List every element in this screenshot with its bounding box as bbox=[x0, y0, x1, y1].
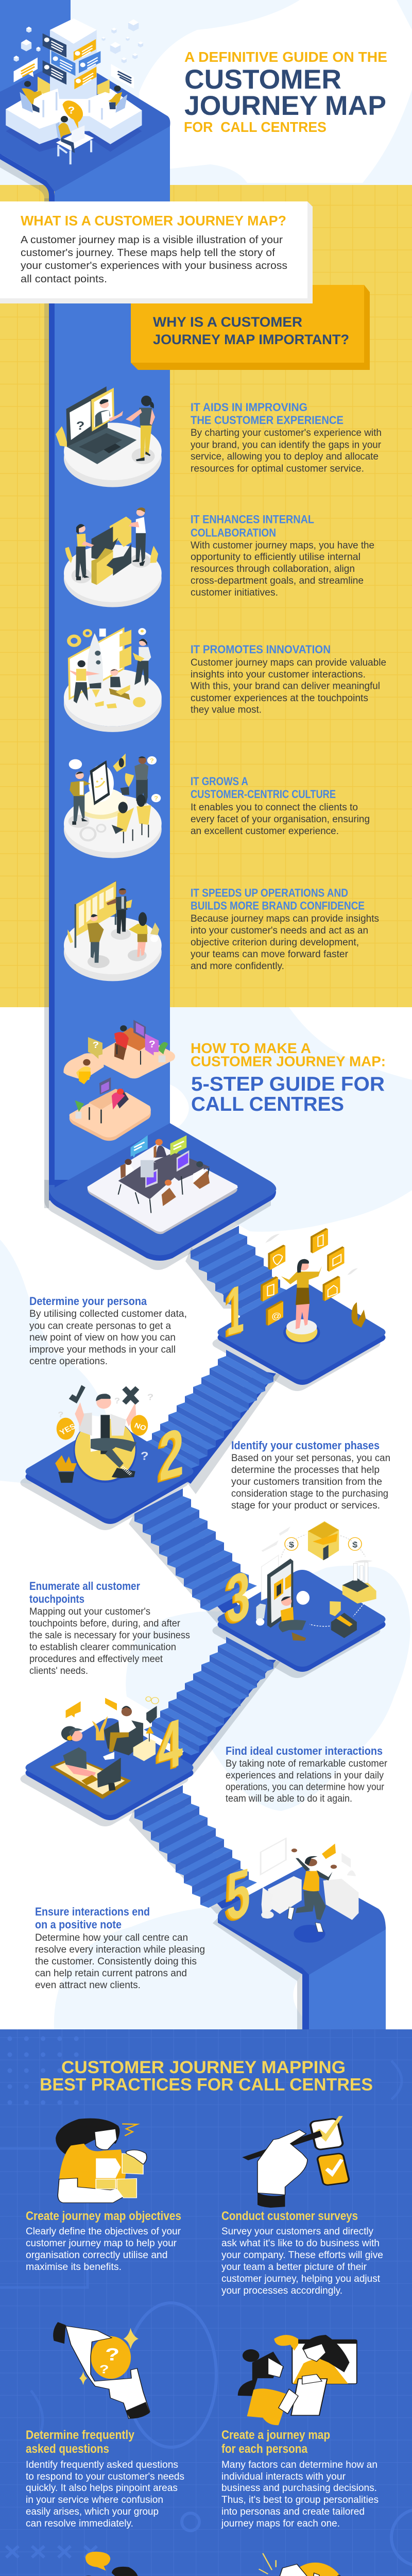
text: it promotes innovation: Customer journey maps can provide valuable bbox=[191, 657, 386, 668]
illustration: customer calling and support desks bbox=[63, 1020, 238, 1234]
panel: what is a customer journey map: A customer journey map is a visible illustration of your bbox=[21, 234, 283, 246]
column: lower platform bbox=[44, 1123, 276, 1270]
step 3: enumerate all customer touchpoints bbox=[29, 1580, 190, 1676]
step 4: find ideal customer interactions: operations, you can determine how your bbox=[226, 1782, 385, 1793]
text: conduct customer surveys: Survey your customers and directly bbox=[221, 2226, 373, 2237]
step 1: number: 1 bbox=[225, 1271, 243, 1351]
step 2: undecided man illustration: ? bbox=[141, 1450, 149, 1463]
illustration: customer-centric culture: ? bbox=[154, 795, 158, 802]
platform 3 bbox=[212, 1570, 385, 1678]
persona tiles bbox=[261, 1228, 344, 1326]
text: create a journey map for each persona bbox=[221, 2428, 379, 2529]
yes and no coins: YES bbox=[58, 1422, 77, 1437]
step 1: determine your persona bbox=[29, 1295, 187, 1367]
step 3: enumerate all customer touchpoints: touchpoints bbox=[29, 1592, 84, 1605]
step 4: number: 4 bbox=[158, 1704, 183, 1786]
panel: what is a customer journey map: all contact points. bbox=[21, 274, 107, 285]
text: it enhances internal collaboration: IT ENHANCES INTERNAL bbox=[191, 513, 314, 526]
text: conduct customer surveys: ask what it's like to do business with bbox=[221, 2238, 380, 2249]
chat cards bbox=[43, 33, 100, 89]
text: create journey map objectives: maximise its benefits. bbox=[26, 2262, 122, 2273]
front desk agent bbox=[56, 116, 94, 164]
text: it enhances internal collaboration: resources through collaboration, align bbox=[191, 564, 355, 574]
text: it grows a customer-centric culture bbox=[191, 775, 370, 837]
step 3: number: 3 bbox=[225, 1557, 249, 1639]
step 5: ensure interactions end on a positive note bbox=[35, 1905, 205, 1991]
text: it aids in improving: service, allowing you to deploy and allocate bbox=[191, 451, 379, 462]
text: create a journey map for each persona: business and purchasing decisions. bbox=[221, 2483, 377, 2494]
step 2: identify your customer phases bbox=[231, 1439, 390, 1511]
illustration: hand ticking checkboxes bbox=[244, 2116, 350, 2208]
step 5: ensure interactions end on a positive note: can help retain current patrons and bbox=[35, 1968, 187, 1979]
step 3: enumerate all customer touchpoints: procedures and effectively meet bbox=[29, 1654, 163, 1665]
illustration: hand holding question bubble bbox=[53, 2322, 150, 2419]
text: it promotes innovation: With this, your brand can deliver meaningful bbox=[191, 681, 380, 691]
heading: how to make a customer journey map bbox=[191, 1040, 386, 1115]
step 1: determine your persona: centre operations. bbox=[29, 1356, 108, 1367]
step 5: number: 5 bbox=[224, 1856, 248, 1938]
text: conduct customer surveys: your team a better picture of their bbox=[221, 2262, 367, 2273]
text: create journey map objectives bbox=[26, 2209, 181, 2273]
text: create journey map objectives: organisation correctly utilise and bbox=[26, 2250, 168, 2261]
speech bubbles bbox=[131, 1136, 186, 1158]
text: determine frequently asked questions: in your service where confusion bbox=[26, 2495, 163, 2505]
server tower bbox=[50, 19, 97, 113]
heading: how to make a customer journey map: CUSTOMER JOURNEY MAP: bbox=[191, 1053, 386, 1070]
step 4: number: 4 bbox=[155, 1706, 181, 1788]
text: it promotes innovation: IT PROMOTES INNOVATION bbox=[191, 643, 331, 656]
text: create a journey map for each persona: individual interacts with your bbox=[221, 2471, 346, 2482]
text: it speeds up operations bbox=[191, 886, 379, 972]
step 3: enumerate all customer touchpoints: Mapping out your customer's bbox=[29, 1606, 150, 1617]
text: conduct customer surveys: your company. These efforts will give bbox=[221, 2250, 383, 2261]
stair 3 bbox=[129, 1488, 257, 1623]
heading: how to make a customer journey map: CALL CENTRES bbox=[191, 1093, 344, 1115]
panel: what is a customer journey map bbox=[0, 201, 313, 303]
floating cubes bbox=[14, 19, 143, 63]
text: it speeds up operations: into your customer's needs and act as an bbox=[191, 925, 368, 936]
text: it speeds up operations: and more confidently. bbox=[191, 961, 284, 972]
text: it promotes innovation: customer experiences at the touchpoints bbox=[191, 693, 368, 704]
illustration: laptop video support bbox=[56, 386, 162, 487]
step 1: persona illustration bbox=[261, 1228, 366, 1344]
text: create journey map objectives: customer journey map to help your bbox=[26, 2238, 177, 2249]
panel: what is a customer journey map: customer's journey. These maps help tell the story of bbox=[21, 247, 275, 259]
store and dollars: $ bbox=[289, 1540, 294, 1549]
desks and agents bbox=[75, 1020, 168, 1123]
step 1: determine your persona: By utilising collected customer data, bbox=[29, 1309, 187, 1319]
step 1: number: 1 bbox=[224, 1273, 242, 1352]
illustration: isometric call-centre hero bbox=[6, 19, 143, 164]
parcel bbox=[310, 1601, 357, 1638]
text: it speeds up operations: IT SPEEDS UP OPERATIONS AND bbox=[191, 886, 348, 900]
step 3: enumerate all customer touchpoints: clients' needs. bbox=[29, 1666, 88, 1676]
step 3: number: 3 bbox=[224, 1559, 248, 1640]
store and dollars: $ bbox=[352, 1540, 358, 1549]
heading: how to make a customer journey map: HOW TO MAKE A bbox=[191, 1040, 311, 1056]
heading: how to make a customer journey map: 5-STEP GUIDE FOR bbox=[191, 1073, 385, 1095]
text: it speeds up operations: Because journey maps can provide insights bbox=[191, 913, 379, 924]
text: determine frequently asked questions: quickly. It also helps pinpoint areas bbox=[26, 2483, 178, 2494]
column: upper shaft bbox=[0, 0, 170, 1208]
text: 1 bbox=[227, 1270, 244, 1350]
text: create a journey map for each persona: Many factors can determine how an bbox=[221, 2460, 377, 2470]
yes and no coins bbox=[57, 1415, 148, 1440]
text: conduct customer surveys bbox=[221, 2209, 383, 2296]
platform 4 bbox=[21, 1718, 194, 1826]
yes and no coins: NO bbox=[133, 1422, 147, 1432]
step 2: identify your customer phases: stage for your product or services. bbox=[231, 1500, 380, 1511]
text: it aids in improving bbox=[191, 401, 382, 474]
illustration: two women reviewing a persona bbox=[238, 2335, 357, 2425]
text: determine frequently asked questions: to respond to your customer's needs bbox=[26, 2471, 184, 2482]
step 5: ensure interactions end on a positive note: the customer. Consistently doing this bbox=[35, 1956, 197, 1967]
illustration: laptop video support: ? bbox=[76, 419, 84, 433]
main column and platforms bbox=[0, 0, 276, 1270]
text: determine frequently asked questions: easily arises, which your group bbox=[26, 2506, 159, 2517]
persona tiles: @ bbox=[271, 1311, 282, 1321]
step 5: number: 5 bbox=[227, 1854, 250, 1936]
text: it speeds up operations: BUILDS MORE BRAND CONFIDENCE bbox=[191, 900, 365, 912]
staircases and step platforms bbox=[21, 1226, 386, 2029]
step 1: determine your persona: improve your methods in your call bbox=[29, 1345, 176, 1355]
step 3: enumerate all customer touchpoints: to establish clearer communication bbox=[29, 1642, 176, 1653]
text: it enhances internal collaboration bbox=[191, 513, 374, 598]
step 3: enumerate all customer touchpoints: the sale is necessary for your business bbox=[29, 1630, 190, 1641]
text: create a journey map for each persona: for each persona bbox=[221, 2442, 308, 2456]
text: it grows a customer-centric culture: CUSTOMER-CENTRIC CULTURE bbox=[191, 788, 336, 801]
text: conduct customer surveys: your processes accordingly. bbox=[221, 2285, 342, 2296]
step 2: undecided man illustration bbox=[55, 1385, 153, 1483]
text: it enhances internal collaboration: customer initiatives. bbox=[191, 587, 278, 598]
step 4: find ideal customer interactions: experiences and relations in your daily bbox=[226, 1770, 384, 1781]
illustration: customer-centric culture: ? bbox=[150, 757, 154, 764]
text: determine frequently asked questions: can resolve immediately. bbox=[26, 2518, 133, 2529]
step 1: determine your persona: new point of view on how you can bbox=[29, 1332, 176, 1343]
title: FOR CALL CENTRES bbox=[184, 119, 327, 135]
text: it grows a customer-centric culture: every facet of your organisation, ensuring bbox=[191, 814, 370, 825]
text: conduct customer surveys: customer journey, helping you adjust bbox=[221, 2274, 381, 2284]
illustration: hand holding question bubble: ? bbox=[105, 2344, 119, 2364]
step 5: ensure interactions end on a positive note: Determine how your call centre can bbox=[35, 1933, 188, 1943]
stair 5 bbox=[129, 1785, 257, 1914]
text: determine frequently asked questions: Determine frequently bbox=[26, 2428, 135, 2442]
text: create a journey map for each persona: journey maps for each one. bbox=[221, 2518, 340, 2529]
text: conduct customer surveys: Conduct customer surveys bbox=[221, 2209, 358, 2223]
agents at desks bbox=[20, 77, 127, 120]
step 5: ensure interactions end on a positive note: even attract new clients. bbox=[35, 1980, 141, 1991]
text: it aids in improving: THE CUSTOMER EXPERIENCE bbox=[191, 414, 344, 427]
step 2: undecided man illustration: ? bbox=[114, 1396, 120, 1405]
text: it speeds up operations: your teams can move forward faster bbox=[191, 949, 349, 960]
step 5: happy customer illustration bbox=[261, 1838, 358, 1943]
step 4: find ideal customer interactions: team will be able to do it again. bbox=[226, 1793, 352, 1804]
text: create journey map objectives: Clearly define the objectives of your bbox=[26, 2226, 181, 2237]
text: it promotes innovation bbox=[191, 643, 386, 715]
background: page sections bbox=[0, 0, 412, 2029]
step 5: number: 5 bbox=[225, 1855, 249, 1937]
step 2: identify your customer phases: determine the processes that help bbox=[231, 1465, 380, 1476]
step 4: find ideal customer interactions: Find ideal customer interactions bbox=[226, 1744, 383, 1757]
illustration: clapping hands bbox=[248, 2553, 346, 2576]
text: create a journey map for each persona: Create a journey map bbox=[221, 2428, 330, 2442]
step 2: identify your customer phases: Based on your set personas, you can bbox=[231, 1453, 390, 1464]
step 1: determine your persona: you can create personas to get a bbox=[29, 1321, 171, 1331]
heading: best practices bbox=[40, 2058, 373, 2095]
text: determine frequently asked questions bbox=[26, 2428, 184, 2529]
step 2: number: 2 bbox=[159, 1414, 184, 1496]
illustration: customer-centric culture bbox=[64, 753, 162, 858]
platform 1 bbox=[212, 1283, 385, 1391]
step 4: number: 4 bbox=[157, 1705, 182, 1787]
text: it aids in improving: resources for optimal customer service. bbox=[191, 464, 364, 474]
step 4: find ideal customer interactions: By taking note of remarkable customer bbox=[226, 1758, 388, 1769]
text: it promotes innovation: insights into your customer interactions. bbox=[191, 669, 366, 680]
step 5: ensure interactions end on a positive note: Ensure interactions end bbox=[35, 1905, 150, 1918]
text: it grows a customer-centric culture: an excellent customer experience. bbox=[191, 826, 339, 837]
step 3: enumerate all customer touchpoints: Enumerate all customer bbox=[29, 1580, 140, 1592]
text: determine frequently asked questions: asked questions bbox=[26, 2442, 109, 2456]
title: A DEFINITIVE GUIDE ON THE bbox=[184, 49, 387, 65]
text: it grows a customer-centric culture: IT GROWS A bbox=[191, 775, 248, 788]
illustration: team at planning board bbox=[64, 881, 162, 981]
step 5: ensure interactions end on a positive note: resolve every interaction while pleasing bbox=[35, 1944, 205, 1955]
panel: why is a customer journey map important: JOURNEY MAP IMPORTANT? bbox=[153, 332, 349, 347]
illustration: rocket innovation bbox=[64, 628, 162, 732]
illustration: puzzle collaboration bbox=[64, 507, 162, 607]
step 1: number bbox=[224, 1270, 244, 1352]
panel: why is a customer journey map important bbox=[131, 285, 370, 370]
factory bbox=[342, 1560, 376, 1616]
text: it enhances internal collaboration: COLLABORATION bbox=[191, 527, 276, 539]
stair 4 bbox=[144, 1637, 280, 1775]
text: it speeds up operations: objective criterion during development, bbox=[191, 937, 359, 948]
text: it enhances internal collaboration: cross-department goals, and streamline bbox=[191, 575, 364, 586]
call centre floor bbox=[88, 1139, 238, 1234]
platform 2 bbox=[21, 1422, 194, 1530]
step 2: undecided man illustration: ? bbox=[58, 1410, 63, 1419]
question bubble bbox=[62, 100, 83, 129]
text: create a journey map for each persona: into personas and create tailored bbox=[221, 2506, 365, 2517]
step 2: identify your customer phases: your customers transition from the bbox=[231, 1477, 382, 1487]
heading: best practices: CUSTOMER JOURNEY MAPPING bbox=[61, 2058, 346, 2077]
text: create a journey map for each persona: Thus, it's best to group personalities bbox=[221, 2495, 379, 2505]
stair 2 bbox=[144, 1350, 280, 1494]
step 2: identify your customer phases: consideration stage to the purchasing bbox=[231, 1488, 388, 1499]
step 2: identify your customer phases: Identify your customer phases bbox=[231, 1439, 380, 1452]
stair 1 bbox=[185, 1226, 305, 1337]
illustration: bearded man with phone bbox=[51, 2552, 148, 2576]
step 5: ensure interactions end on a positive note: on a positive note bbox=[35, 1918, 122, 1931]
title: CUSTOMER bbox=[184, 64, 341, 95]
step 3: enumerate all customer touchpoints: touchpoints before, during, and after bbox=[29, 1618, 181, 1629]
step 1: determine your persona: Determine your persona bbox=[29, 1295, 147, 1308]
text: it enhances internal collaboration: With customer journey maps, you have the bbox=[191, 540, 374, 551]
step 4: find ideal customer interactions bbox=[226, 1744, 388, 1804]
text: determine frequently asked questions: Identify frequently asked questions bbox=[26, 2460, 178, 2470]
step 4: customer interaction illustration bbox=[50, 1697, 159, 1799]
step 2: number: 2 bbox=[156, 1416, 182, 1498]
panel: best practices background bbox=[0, 2029, 412, 2576]
text: it aids in improving: By charting your customer's experience with bbox=[191, 428, 382, 438]
step 3: omnichannel shopping illustration bbox=[256, 1521, 376, 1641]
illustration: woman with puzzle pieces bbox=[56, 2119, 147, 2203]
text: create journey map objectives: Create journey map objectives bbox=[26, 2209, 181, 2223]
question bubble: ? bbox=[68, 105, 75, 116]
desks and agents: ? bbox=[149, 1039, 156, 1050]
panel: what is a customer journey map: WHAT IS A CUSTOMER JOURNEY MAP? bbox=[21, 213, 286, 229]
heading: best practices: BEST PRACTICES FOR CALL CENTRES bbox=[40, 2075, 373, 2095]
step 3: number: 3 bbox=[227, 1556, 250, 1638]
text: it enhances internal collaboration: opportunity to efficiently utilise internal bbox=[191, 552, 360, 563]
title: JOURNEY MAP bbox=[184, 91, 386, 121]
text: it promotes innovation: they value most. bbox=[191, 705, 262, 715]
text: it aids in improving: your brand, you can identify the gaps in your bbox=[191, 440, 382, 450]
final platform and column bbox=[213, 1867, 386, 2029]
step 2: undecided man illustration: ? bbox=[147, 1393, 153, 1402]
step 2: number: 2 bbox=[158, 1414, 183, 1497]
desks and agents: ? bbox=[93, 1040, 99, 1050]
store and dollars bbox=[281, 1521, 365, 1561]
illustration: hand holding question bubble: ? bbox=[99, 2363, 109, 2376]
title bbox=[184, 49, 387, 135]
text: it grows a customer-centric culture: It enables you to connect the clients to bbox=[191, 802, 358, 813]
text: it aids in improving: IT AIDS IN IMPROVING bbox=[191, 401, 307, 414]
speech bubbles bbox=[14, 58, 134, 89]
panel: what is a customer journey map: your customer's experiences with your business across bbox=[21, 260, 287, 272]
panel: why is a customer journey map important: WHY IS A CUSTOMER bbox=[153, 314, 302, 330]
